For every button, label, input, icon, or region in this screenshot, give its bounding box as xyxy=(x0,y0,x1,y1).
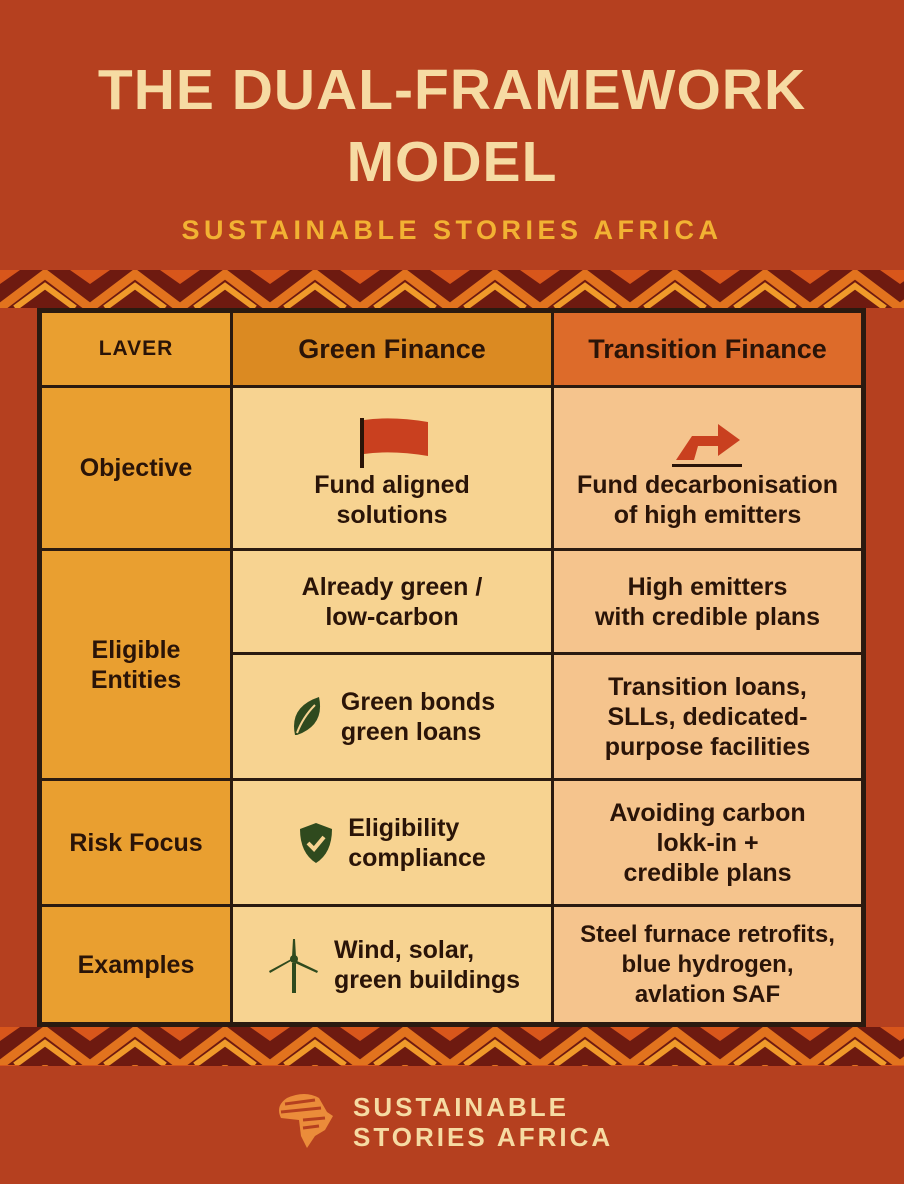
header: transition finance xyxy=(551,310,864,388)
icon: shield xyxy=(300,823,332,863)
icon: arrow xyxy=(672,424,742,467)
footer text: STORIES AFRICA xyxy=(353,1122,613,1152)
cell: green risk xyxy=(230,778,554,907)
header: transition finance: Transition Finance xyxy=(588,334,827,364)
cell: transition instruments: purpose facilities xyxy=(605,732,810,760)
cell: transition risk: credible plans xyxy=(623,858,792,886)
header: layer xyxy=(39,310,233,388)
cell: transition eligible: with credible plans xyxy=(595,602,820,630)
cell: green instruments: Green bonds xyxy=(341,688,495,716)
cell: transition risk: lokk-in + xyxy=(656,828,759,856)
row label: examples: Examples xyxy=(78,950,194,978)
cell: green examples: Wind, solar, xyxy=(334,936,474,964)
row label: eligible entities: Entities xyxy=(91,666,181,694)
cell: green examples: green buildings xyxy=(334,966,520,994)
row label: examples xyxy=(39,904,233,1025)
cell: green instruments: green loans xyxy=(341,718,481,746)
icon: africa xyxy=(279,1094,333,1148)
table xyxy=(37,308,866,1027)
cell: transition examples xyxy=(551,904,864,1025)
row label: objective: Objective xyxy=(80,454,192,482)
row label: eligible entities xyxy=(39,548,233,781)
cell: transition examples: Steel furnace retrofits, xyxy=(580,920,835,948)
title xyxy=(98,58,806,194)
icon: wind turbine xyxy=(269,939,318,993)
cell: green objective: solutions xyxy=(336,501,448,529)
cell: green objective xyxy=(230,385,554,551)
cell: transition instruments: SLLs, dedicated- xyxy=(607,702,808,730)
cell: transition objective xyxy=(551,385,864,551)
header: green finance xyxy=(230,310,554,388)
row label: eligible entities: Eligible xyxy=(92,636,180,664)
title: MODEL xyxy=(347,130,557,194)
icon: flag xyxy=(360,418,428,468)
row label: objective xyxy=(39,385,233,551)
cell: transition objective: of high emitters xyxy=(614,501,801,529)
icon: leaf xyxy=(294,697,320,735)
cell: transition instruments: Transition loans, xyxy=(608,672,807,700)
cell: transition eligible: High emitters xyxy=(628,572,787,600)
subtitle: SUSTAINABLE STORIES AFRICA xyxy=(181,215,723,245)
header: green finance: Green Finance xyxy=(298,334,486,364)
cell: transition risk: Avoiding carbon xyxy=(609,798,806,826)
cell: transition objective: Fund decarbonisation xyxy=(577,471,838,499)
cell: transition risk xyxy=(551,778,864,907)
footer logo xyxy=(279,1092,613,1152)
cell: green risk: compliance xyxy=(348,844,486,872)
band bottom xyxy=(0,1027,904,1066)
row label: risk focus: Risk Focus xyxy=(69,828,203,856)
footer text xyxy=(353,1092,613,1152)
band top xyxy=(0,270,904,308)
row label: risk focus xyxy=(39,778,233,907)
cell: transition examples: avlation SAF xyxy=(635,980,780,1008)
cell: transition eligible xyxy=(551,548,864,655)
cell: green instruments xyxy=(230,652,554,781)
cell: green risk: Eligibility xyxy=(348,814,459,842)
cell: green objective: Fund aligned xyxy=(314,471,470,499)
cell: green eligible: Already green / xyxy=(302,572,482,600)
header: layer: LAVER xyxy=(99,337,173,360)
cell: green examples xyxy=(230,904,554,1025)
cell: transition instruments xyxy=(551,652,864,781)
cell: green eligible xyxy=(230,548,554,655)
title: THE DUAL-FRAMEWORK xyxy=(98,58,806,122)
footer text: SUSTAINABLE xyxy=(353,1092,569,1122)
cell: transition examples: blue hydrogen, xyxy=(621,950,794,978)
cell: green eligible: low-carbon xyxy=(325,602,459,630)
